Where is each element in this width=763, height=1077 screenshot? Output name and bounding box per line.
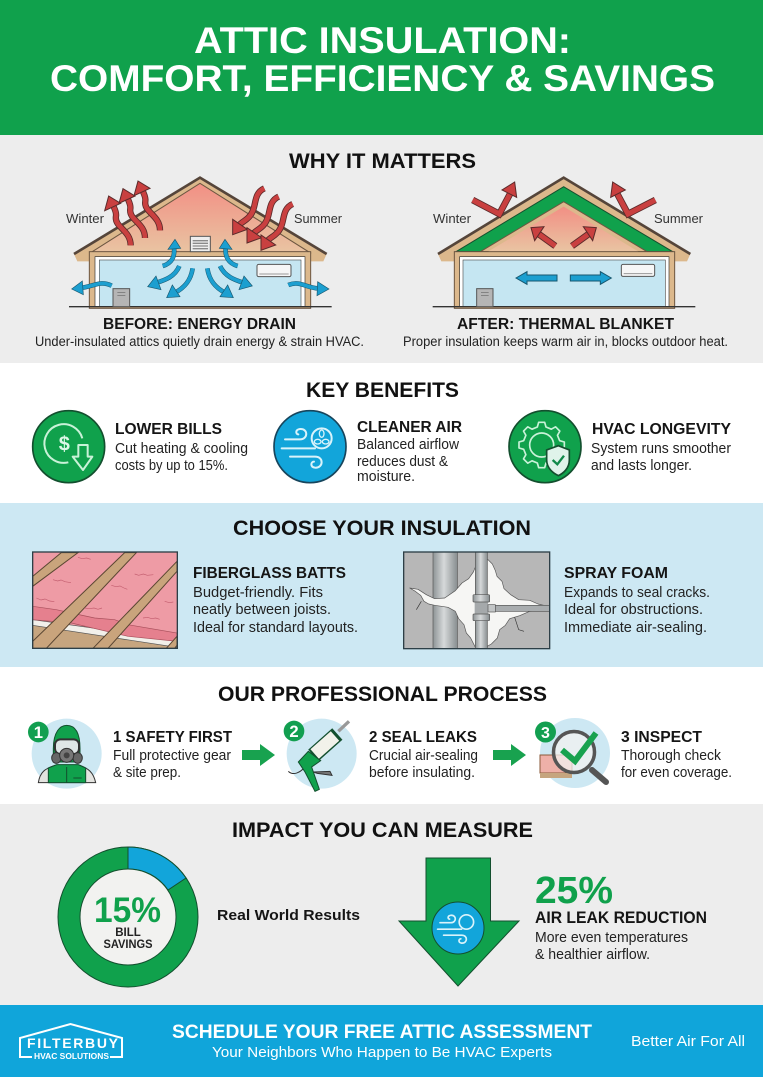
heading: impact: IMPACT YOU CAN MEASURE — [232, 819, 533, 842]
panel: header — [0, 0, 763, 135]
chart: 15% donut — [58, 847, 198, 987]
text: hvac longevity — [591, 421, 731, 474]
text: safety first — [113, 729, 232, 781]
icon: lower bills: $ — [59, 434, 70, 456]
text: spray foam: SPRAY FOAM — [564, 565, 668, 582]
icon: down arrow — [399, 858, 519, 986]
panel: key benefits — [0, 363, 763, 503]
panel: footer — [0, 1005, 763, 1077]
arrows: heat retained — [531, 227, 596, 246]
text: cleaner air: moisture. — [357, 469, 415, 485]
panel: impact — [0, 804, 763, 1005]
icon: furnace — [477, 289, 493, 307]
logo: filterbuy: FILTERBUY — [27, 1035, 119, 1051]
text: before description: Under-insulated attics quietly drain energy & strain HVAC. — [35, 334, 364, 349]
badge: step 3: 3 — [541, 725, 550, 742]
label: summer left: Summer — [294, 211, 343, 226]
diagram: after house — [433, 178, 695, 308]
text: fiberglass batts: Budget-friendly. Fits — [193, 585, 323, 601]
text: lower bills: costs by up to 15%. — [115, 458, 228, 474]
text: tagline: Better Air For All — [631, 1033, 745, 1050]
text: seal leaks: before insulating. — [369, 765, 475, 781]
arrows: winter heat escaping — [105, 181, 160, 245]
text: fiberglass batts: FIBERGLASS BATTS — [193, 565, 346, 582]
illustration: fiberglass batts — [33, 552, 177, 648]
subheading: before: BEFORE: ENERGY DRAIN — [103, 316, 296, 333]
title — [50, 20, 715, 99]
illustration: spray foam — [404, 552, 550, 649]
text: cleaner air — [357, 419, 462, 485]
text: air leak reduction: 25% — [535, 870, 613, 912]
text: cleaner air: CLEANER AIR — [357, 419, 462, 436]
arrows: heat deflected — [473, 182, 655, 214]
text: hvac longevity: and lasts longer. — [591, 458, 692, 474]
title: COMFORT, EFFICIENCY & SAVINGS — [50, 58, 715, 99]
text: seal leaks: Crucial air-sealing — [369, 748, 478, 764]
text: inspect — [621, 729, 732, 781]
icon: wall ac unit — [257, 264, 291, 277]
label: winter left: Winter — [66, 211, 105, 226]
diagram: before house — [69, 178, 332, 308]
text: spray foam: Expands to seal cracks. — [564, 585, 710, 601]
icon: safety gear — [28, 719, 102, 789]
text: air leak reduction: & healthier airflow. — [535, 947, 650, 963]
text: inspect: Thorough check — [621, 748, 722, 764]
text: hvac longevity: HVAC LONGEVITY — [592, 421, 731, 438]
title: ATTIC INSULATION: — [194, 20, 571, 61]
text: after description: Proper insulation keeps warm air in, blocks outdoor heat. — [403, 334, 728, 349]
label: winter right: Winter — [433, 211, 472, 226]
text: safety first: 1 SAFETY FIRST — [113, 729, 232, 746]
icon: hvac longevity — [509, 411, 581, 483]
text: lower bills — [115, 421, 248, 474]
icon: wall ac unit — [621, 264, 655, 276]
text: safety first: & site prep. — [113, 765, 181, 781]
text: lower bills: LOWER BILLS — [115, 421, 222, 438]
arrows: balanced air — [516, 272, 611, 284]
icon: inspection magnifier — [535, 718, 610, 788]
heading: choose your insulation: CHOOSE YOUR INSULATION — [233, 517, 531, 540]
text: cleaner air: reduces dust & — [357, 454, 448, 470]
text: call to action: SCHEDULE YOUR FREE ATTIC ASSESSMENT — [172, 1022, 592, 1043]
subheading: after: AFTER: THERMAL BLANKET — [457, 316, 674, 333]
panel: why it matters — [0, 135, 763, 363]
panel: choose your insulation — [0, 503, 763, 667]
text: spray foam: Immediate air-sealing. — [564, 620, 707, 636]
text: air leak reduction: AIR LEAK REDUCTION — [535, 909, 707, 927]
text: lower bills: Cut heating & cooling — [115, 441, 248, 457]
arrows: summer heat entering — [233, 188, 293, 250]
text: fiberglass batts: neatly between joists. — [193, 602, 331, 618]
arrow: step 1 to 2 — [242, 744, 275, 766]
text: spray foam — [564, 565, 710, 636]
icon: caulk gun — [284, 719, 357, 791]
logo: filterbuy — [20, 1024, 122, 1061]
text: cleaner air: Balanced airflow — [357, 437, 459, 453]
text: hvac longevity: System runs smoother — [591, 441, 731, 457]
text: call to action — [172, 1022, 592, 1061]
text: real world results: Real World Results — [217, 907, 360, 924]
text: spray foam: Ideal for obstructions. — [564, 602, 703, 618]
arrows: conditioned air escaping — [72, 239, 329, 298]
text: inspect: for even coverage. — [621, 765, 732, 781]
badge: step 2: 2 — [289, 722, 299, 741]
panel: professional process — [0, 667, 763, 804]
text: safety first: Full protective gear — [113, 748, 231, 764]
text: fiberglass batts: Ideal for standard layouts. — [193, 620, 358, 636]
text: air leak reduction — [535, 870, 707, 963]
chart: 15% donut: BILL — [115, 927, 141, 939]
text: seal leaks: 2 SEAL LEAKS — [369, 729, 477, 746]
icon: lower bills — [33, 411, 105, 483]
heading: key benefits: KEY BENEFITS — [306, 379, 459, 402]
chart: 15% donut: 15% — [94, 891, 161, 930]
text: inspect: 3 INSPECT — [621, 729, 702, 746]
heading: process: OUR PROFESSIONAL PROCESS — [218, 683, 547, 706]
chart: 15% donut: SAVINGS — [104, 939, 153, 951]
logo: filterbuy: HVAC SOLUTIONS — [34, 1052, 110, 1061]
arrow: step 2 to 3 — [493, 744, 526, 766]
icon: furnace — [113, 289, 130, 307]
text: fiberglass batts — [193, 565, 358, 636]
heading: why it matters: WHY IT MATTERS — [289, 150, 476, 173]
badge: step 1: 1 — [34, 723, 43, 742]
text: air leak reduction: More even temperatures — [535, 930, 688, 946]
text: call to action: Your Neighbors Who Happen to Be HVAC Experts — [212, 1044, 552, 1061]
label: summer right: Summer — [654, 211, 704, 226]
icon: cleaner air — [274, 411, 346, 483]
text: seal leaks — [369, 729, 478, 781]
icon: attic vent — [190, 236, 210, 252]
